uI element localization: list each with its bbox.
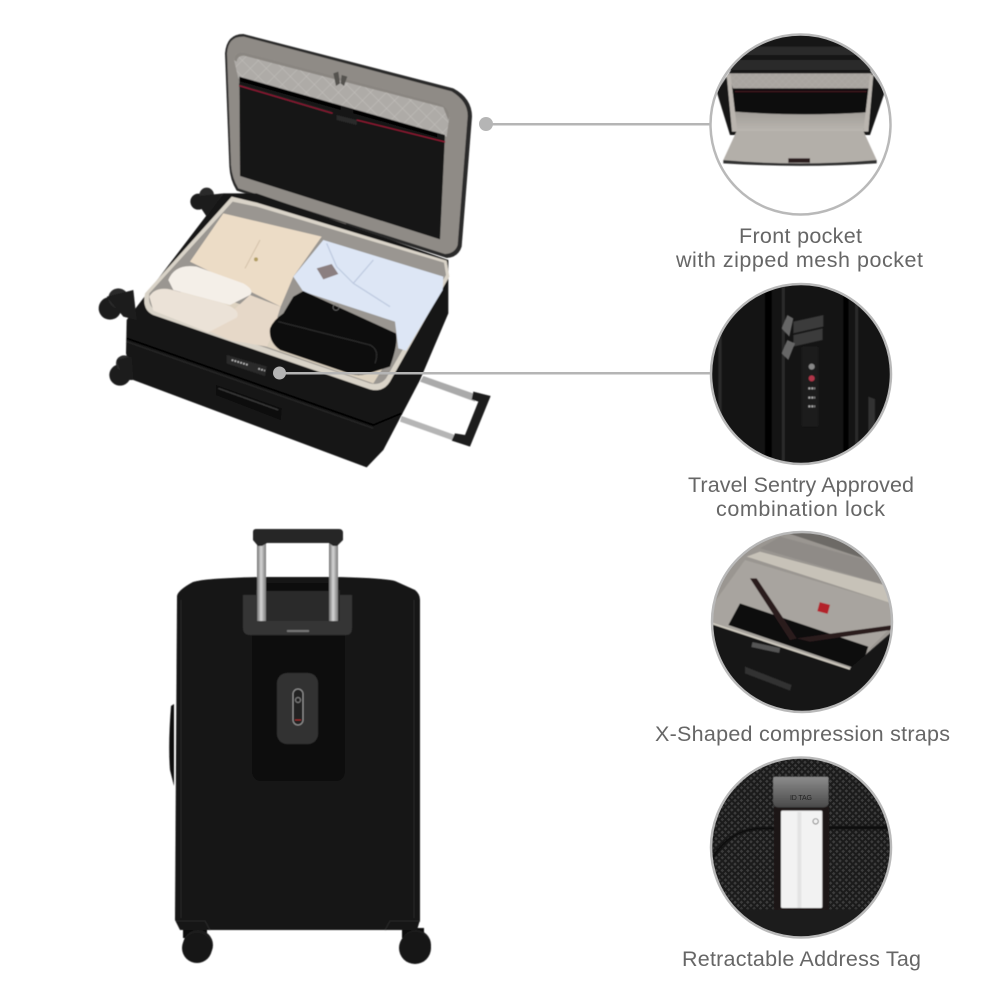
body seams [176, 600, 420, 930]
callout line: front pocket [479, 117, 710, 131]
suitcase body [175, 577, 420, 930]
lock plate [227, 355, 267, 376]
rear view suitcase illustration [169, 529, 431, 964]
label: compression straps: X-Shaped compression straps [655, 722, 950, 746]
label: front pocket [675, 224, 923, 272]
beige shirt [190, 213, 322, 307]
label: combination lock: Travel Sentry Approved [688, 473, 914, 497]
label: front pocket: with zipped mesh pocket [675, 248, 923, 272]
side bulge [169, 704, 174, 786]
callout line: lock [273, 366, 711, 380]
case interior lining [144, 197, 449, 390]
blue shirt [293, 240, 443, 351]
case body [126, 193, 448, 467]
logo [329, 219, 346, 224]
handle grip [253, 529, 343, 546]
zip pullers [333, 72, 347, 86]
detail circle: front pocket [705, 30, 895, 220]
top handle recess plate [243, 560, 352, 635]
label: combination lock: combination lock [716, 497, 885, 521]
panel [252, 630, 345, 781]
detail circle: address tag [710, 756, 892, 939]
cream towel [149, 289, 238, 332]
label: front pocket: Front pocket [739, 224, 862, 248]
label: combination lock [688, 473, 914, 521]
detail circle: compression straps [710, 530, 894, 714]
tag text: ID TAG [790, 795, 812, 802]
mesh pocket [239, 77, 445, 239]
white towel [168, 266, 251, 305]
telescopic handle [400, 376, 491, 447]
handle rails [257, 543, 338, 621]
open suitcase illustration [99, 34, 491, 467]
wheels [182, 928, 431, 964]
lower beige garments [210, 295, 281, 347]
lock unit [277, 673, 318, 744]
folded clothes [149, 213, 443, 375]
label: address tag: Retractable Address Tag [682, 947, 921, 971]
open lid [225, 34, 472, 258]
detail circle: combination lock [705, 280, 895, 470]
wheels [99, 188, 223, 386]
side grip [216, 385, 282, 420]
black pouch [270, 291, 397, 375]
